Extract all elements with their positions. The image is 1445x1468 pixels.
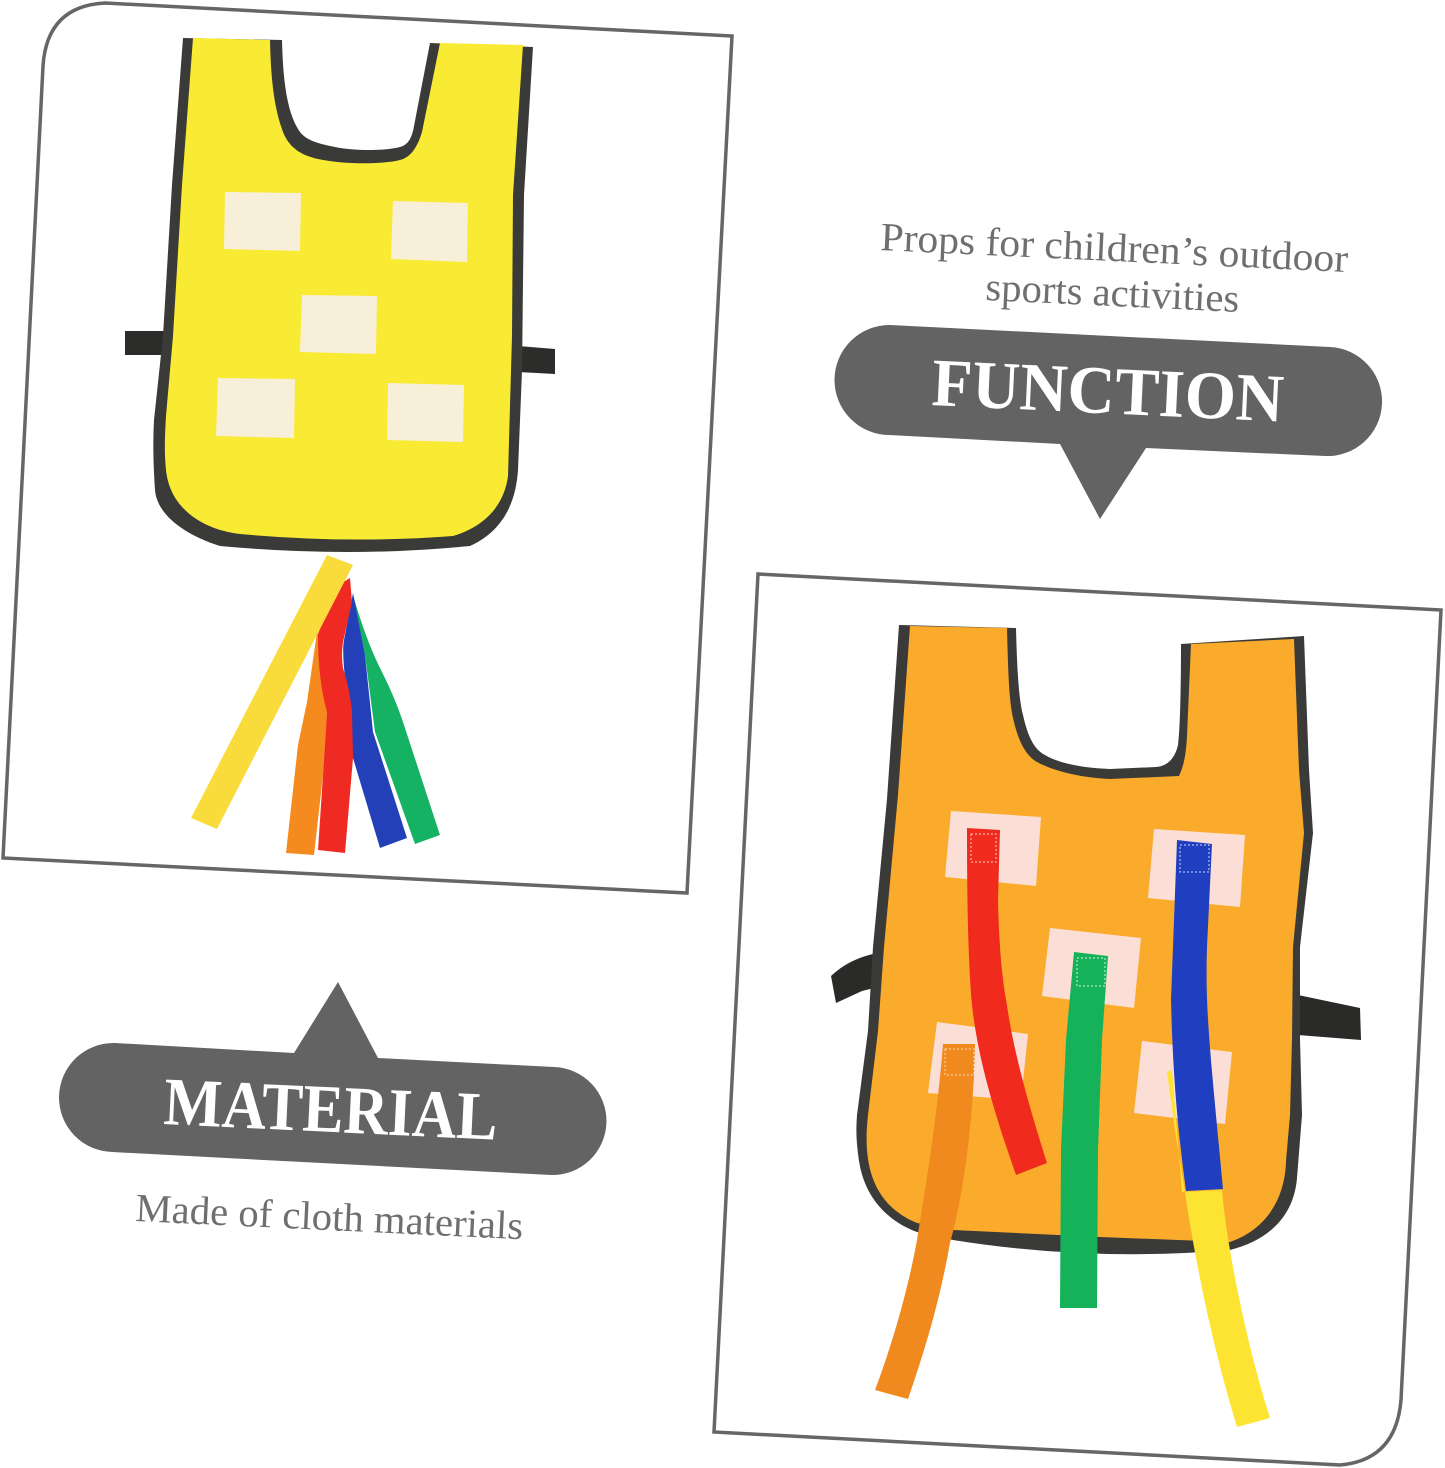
tail: blue [1171,840,1223,1191]
tail: red [967,828,1047,1175]
text: function description: Props for children’s outdoor [880,214,1349,281]
callout: function [834,325,1382,519]
text: function description [880,214,1349,321]
tail: orange [875,1044,975,1399]
tail: green [1060,952,1108,1308]
panel: yellow vest photo frame [3,3,732,893]
velcro patches on orange vest [928,811,1245,1124]
text: material description: Made of cloth materials [135,1185,524,1248]
callout: material [59,982,606,1175]
orange vest [856,625,1313,1254]
strap right [1298,995,1361,1040]
text: function description: sports activities [985,264,1240,321]
heading: function: FUNCTION [930,344,1285,437]
panel: orange vest photo frame [714,574,1441,1465]
strap left [831,953,878,1003]
velcro patches on yellow vest [216,192,468,442]
yellow vest [125,38,555,552]
heading: material: MATERIAL [162,1063,500,1155]
tail: yellow [1167,1070,1270,1427]
tail bundle [191,555,440,855]
